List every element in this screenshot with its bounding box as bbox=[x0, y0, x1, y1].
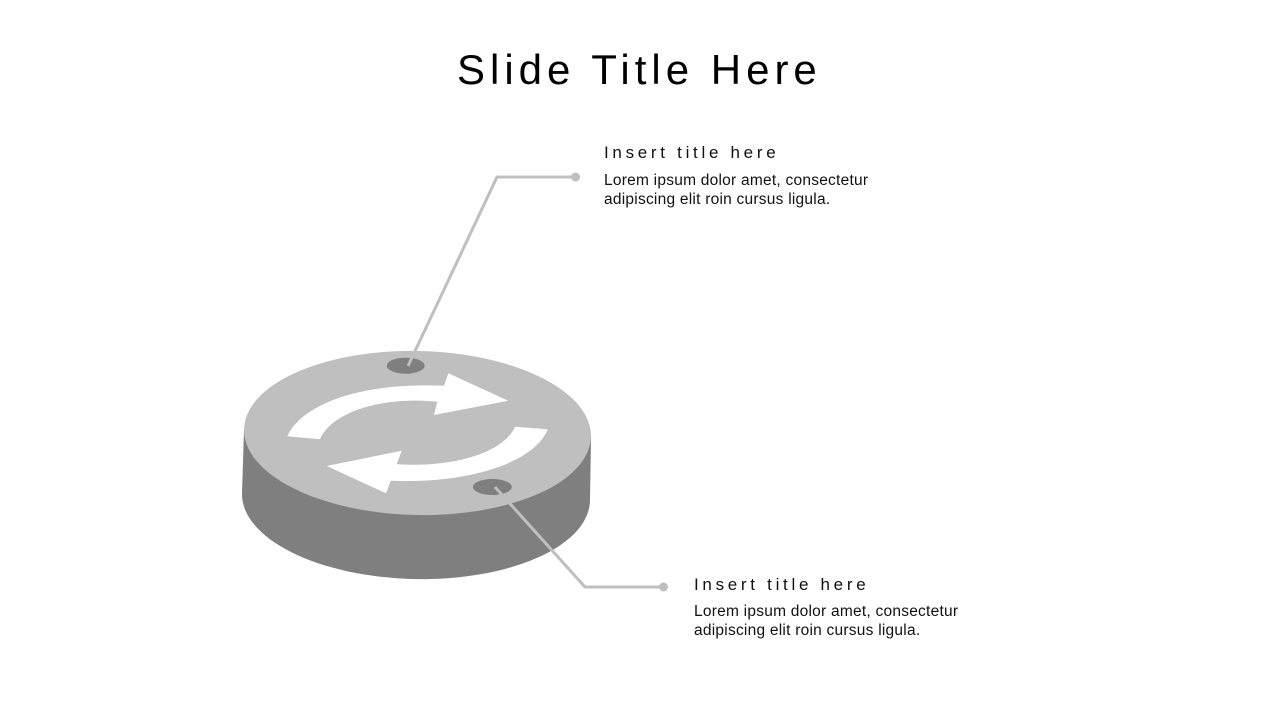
callout body: adipiscing elit roin cursus ligula. bbox=[694, 622, 920, 639]
callout body bbox=[694, 603, 958, 639]
arrow: lower clockwise bbox=[327, 427, 548, 493]
callout heading: Insert title here bbox=[694, 575, 869, 594]
callout: bottom text block bbox=[694, 575, 958, 639]
disc side wall bbox=[242, 430, 591, 579]
disc top face bbox=[242, 347, 593, 519]
callout body: Lorem ipsum dolor amet, consectetur bbox=[604, 172, 868, 189]
callout: top text block bbox=[604, 143, 868, 208]
leader line: top callout bbox=[408, 172, 580, 366]
callout body: Lorem ipsum dolor amet, consectetur bbox=[694, 603, 958, 620]
leader line: bottom callout bbox=[495, 487, 668, 592]
bottom anchor marker bbox=[473, 479, 512, 495]
callout body bbox=[604, 172, 868, 208]
title: Slide Title Here bbox=[457, 46, 822, 93]
callout body: adipiscing elit roin cursus ligula. bbox=[604, 191, 830, 208]
arrow: upper clockwise bbox=[287, 373, 508, 439]
callout heading: Insert title here bbox=[604, 143, 779, 162]
top anchor marker bbox=[387, 358, 425, 374]
